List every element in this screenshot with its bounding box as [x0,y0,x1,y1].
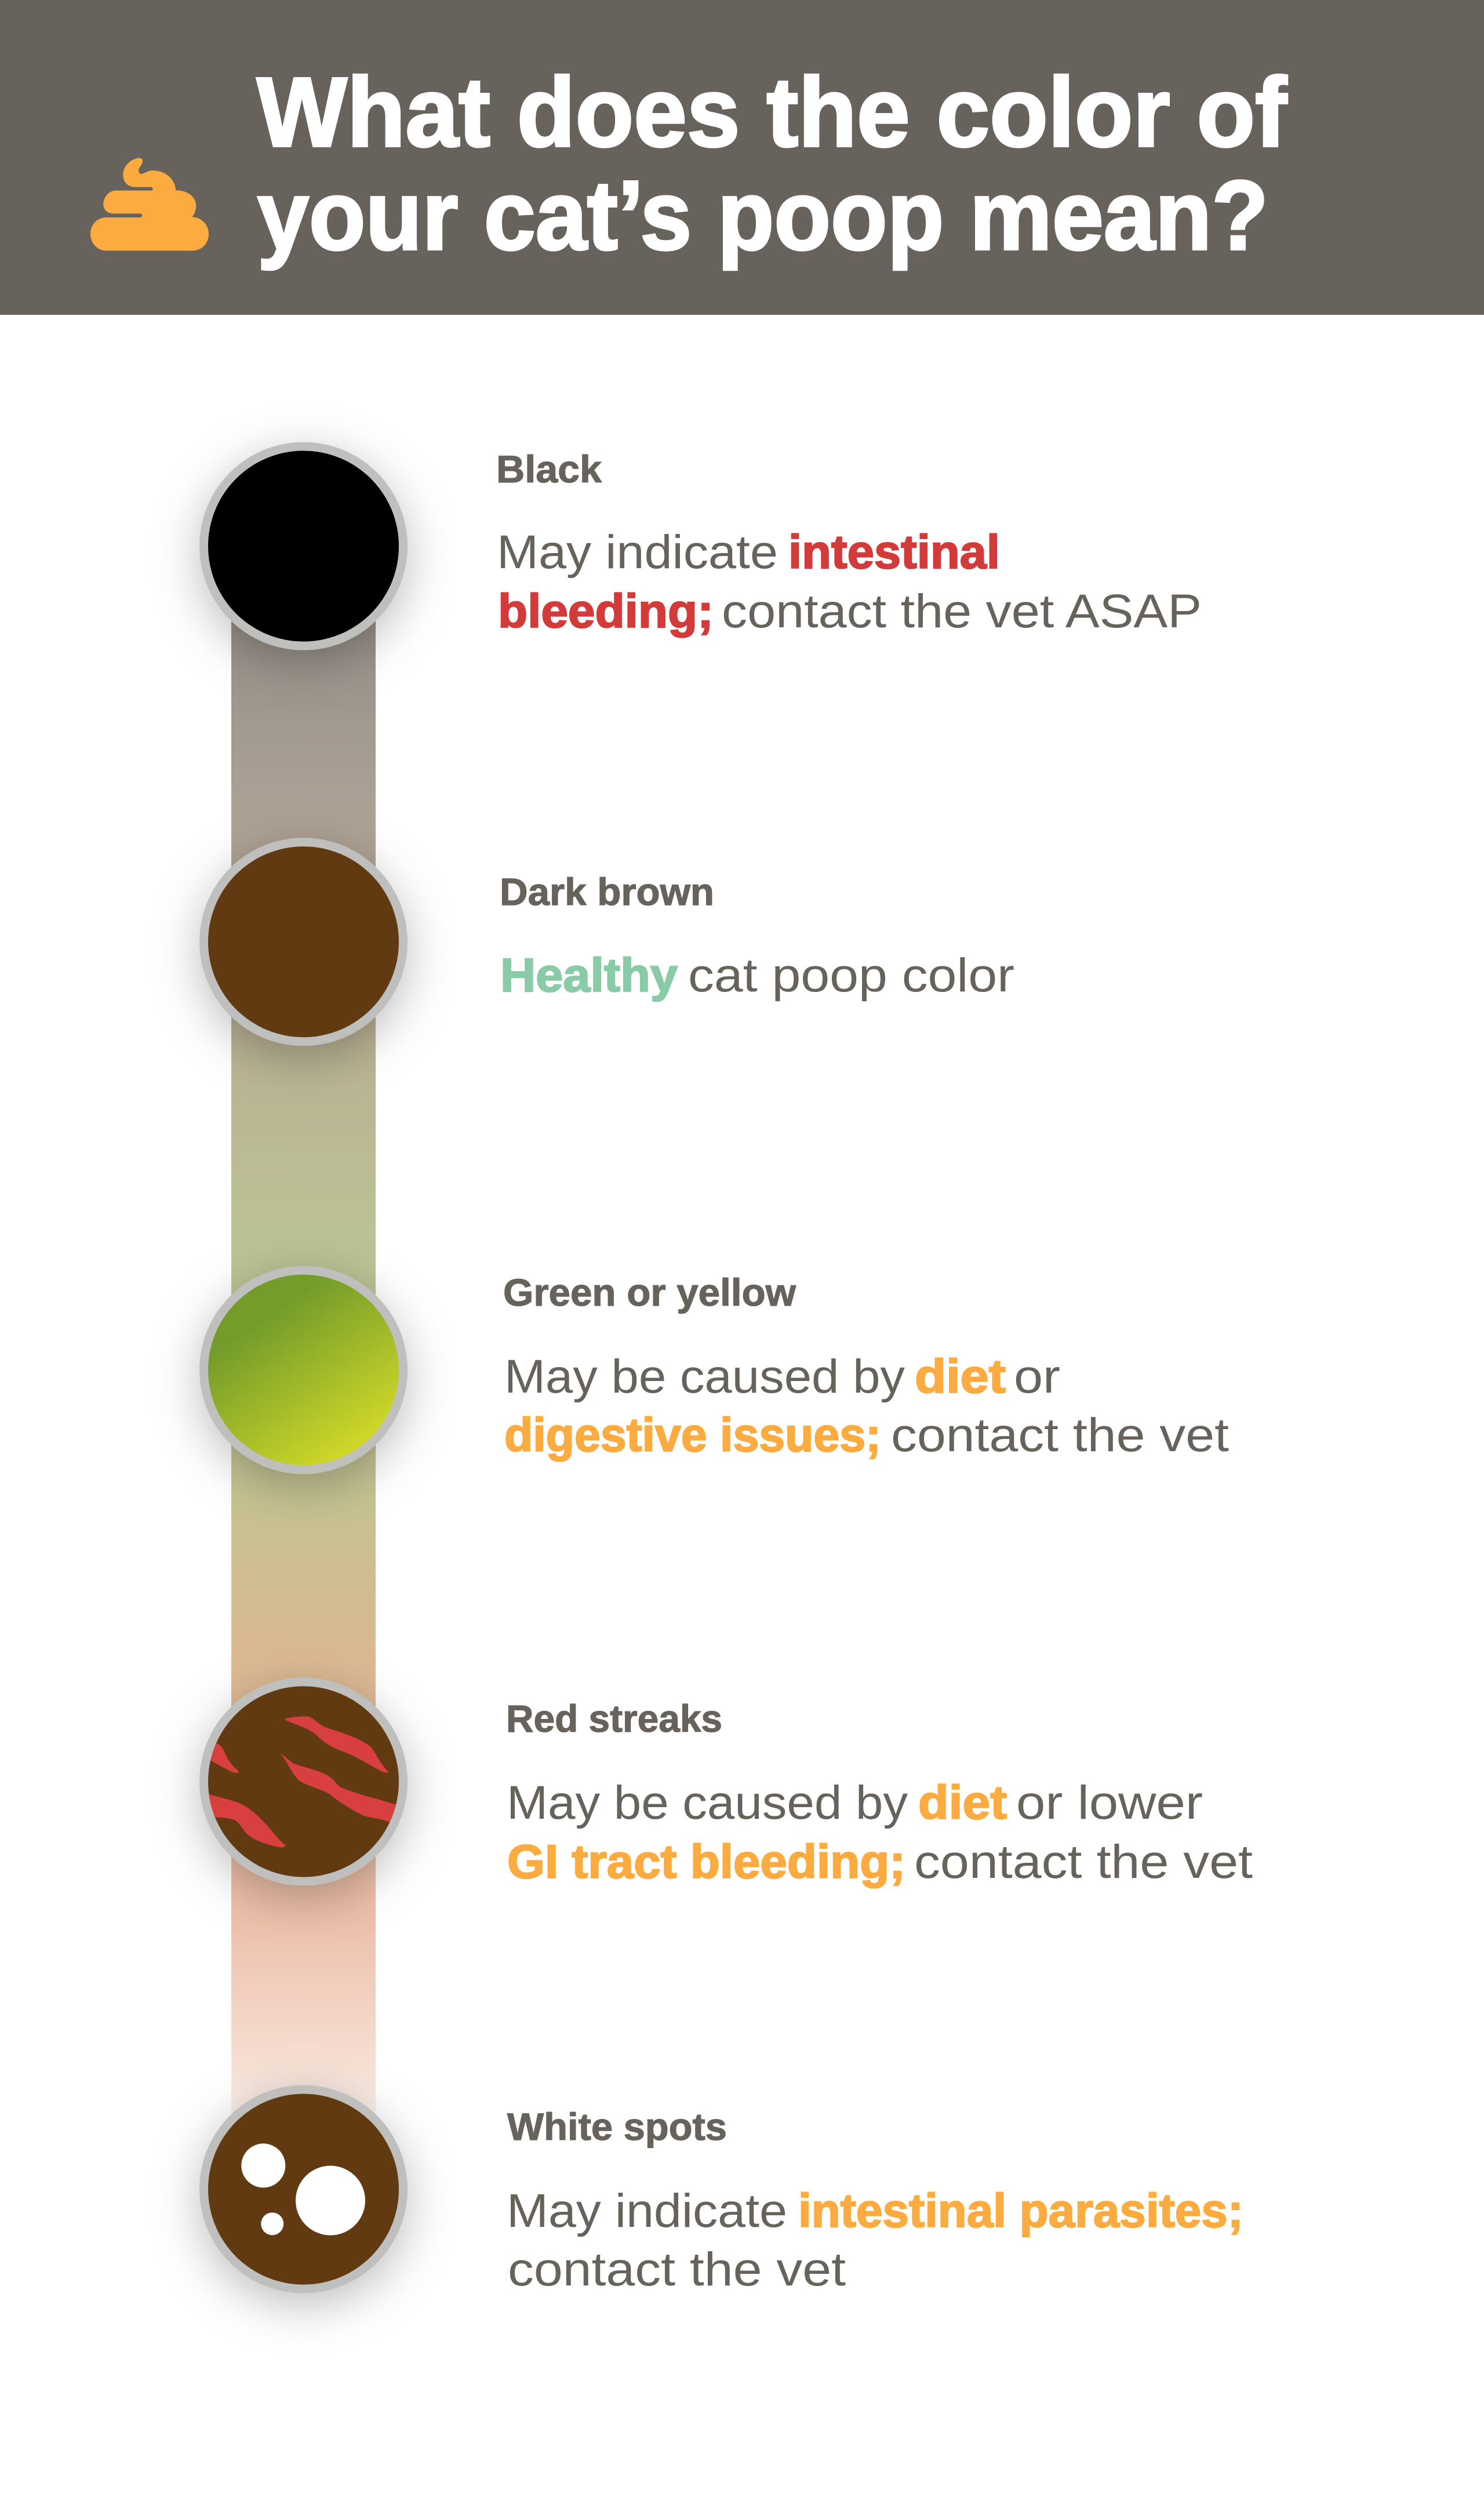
text block: black [496,448,1202,638]
title [257,57,1287,271]
text block: black: intestinal [788,526,1000,579]
text block: red streaks: diet [918,1776,1007,1829]
text block: dark brown [500,870,1014,1002]
text block: red streaks: Red streaks [506,1697,722,1740]
text block: red streaks [506,1697,1253,1888]
text block: black: Black [496,448,602,490]
text block: red streaks: contact the vet [914,1836,1253,1888]
text block: white spots [507,2105,1243,2296]
text block: red streaks: or lower [1016,1776,1203,1829]
text block: black: bleeding; [498,585,714,638]
text block: green or yellow [503,1271,1229,1462]
gradient connector bar [231,580,376,2157]
icon: poop [90,158,209,250]
swatch: red streaks [199,1678,408,1885]
text block: white spots: White spots [507,2105,727,2148]
swatch: white spots [199,2085,408,2294]
text block: green or yellow: Green or yellow [503,1271,796,1314]
text block: red streaks: May be caused by [507,1776,908,1829]
text block: green or yellow: diet [915,1350,1006,1403]
text block: black: contact the vet ASAP [722,585,1202,638]
text block: green or yellow: contact the vet [891,1409,1229,1462]
swatch: dark brown [199,838,408,1046]
swatch: green or yellow [199,1266,408,1474]
title: your cat’s poop mean? [257,161,1268,271]
text block: green or yellow: May be caused by [504,1350,905,1403]
header banner [0,0,1484,315]
text block: green or yellow: or [1014,1350,1060,1403]
text block: red streaks: GI tract bleeding; [507,1836,905,1888]
text block: white spots: May indicate [507,2185,787,2237]
text block: dark brown: Dark brown [500,870,714,913]
text block: white spots: contact the vet [508,2243,846,2296]
text block: dark brown: Healthy [500,949,678,1002]
text block: white spots: intestinal parasites; [798,2185,1243,2237]
title: What does the color of [257,57,1287,168]
text block: green or yellow: digestive issues; [504,1409,881,1462]
text block: dark brown: cat poop color [688,949,1014,1002]
text block: black: May indicate [497,526,778,579]
swatch: black [199,442,408,650]
